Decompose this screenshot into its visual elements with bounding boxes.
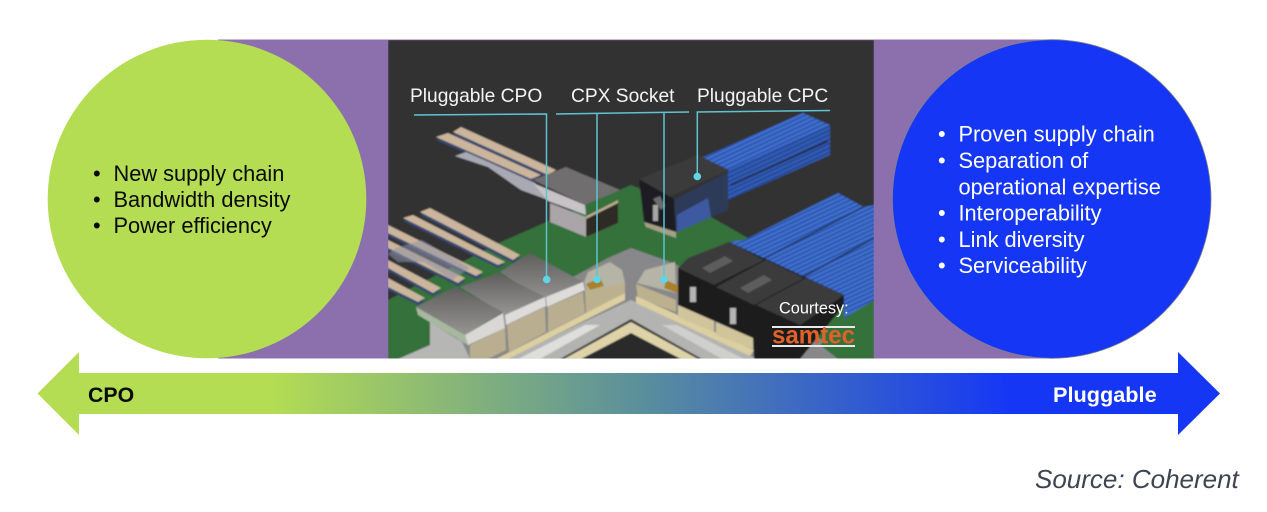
photo callout labels xyxy=(412,88,828,106)
photo callout labels: Pluggable CPO xyxy=(410,86,542,107)
leader line: Pluggable CPO xyxy=(414,114,550,283)
Pluggable attribute list xyxy=(938,122,1161,278)
upper-left module xyxy=(453,133,546,176)
Pluggable attribute list: • xyxy=(938,227,946,252)
Pluggable attribute list: Proven supply chain xyxy=(958,122,1155,146)
green CPO circle xyxy=(48,40,366,358)
Pluggable attribute list: operational expertise xyxy=(958,174,1161,199)
lower-right black connectors xyxy=(678,305,714,332)
Pluggable attribute list: • xyxy=(938,253,946,278)
upper-right blue cable xyxy=(701,113,830,200)
left ribbons xyxy=(388,211,520,305)
CPO attribute list: • xyxy=(93,213,101,238)
lower-right blue cables xyxy=(729,193,874,320)
silver frame xyxy=(458,247,838,358)
arrow label: Pluggable: Pluggable xyxy=(1053,382,1157,407)
left socket xyxy=(584,262,625,292)
CPO attribute list xyxy=(93,161,291,238)
left modules xyxy=(548,292,585,332)
CPO attribute list: • xyxy=(93,187,101,212)
Pluggable attribute list: Serviceability xyxy=(958,253,1087,278)
CPO attribute list: New supply chain xyxy=(114,161,284,186)
leader lines: CPX Socket xyxy=(556,112,689,283)
purple background band xyxy=(218,40,1053,358)
CPO attribute list: Power efficiency xyxy=(114,213,272,238)
Pluggable attribute list: • xyxy=(938,201,946,226)
blue Pluggable circle xyxy=(892,40,1211,358)
Pluggable attribute list: • xyxy=(938,122,946,146)
samtec logo: samtec xyxy=(772,322,855,350)
Pluggable attribute list: Interoperability xyxy=(958,201,1102,226)
photo callout labels: Pluggable CPC xyxy=(697,86,828,107)
CPO attribute list: Bandwidth density xyxy=(114,187,291,212)
spectrum double arrow xyxy=(38,352,1220,435)
right socket xyxy=(637,262,676,293)
upper-right connector xyxy=(674,172,728,232)
courtesy credit: Courtesy: xyxy=(779,300,849,318)
Pluggable attribute list: • xyxy=(938,148,946,173)
leader line: Pluggable CPC xyxy=(694,110,830,180)
source note: Source: Coherent xyxy=(1035,464,1241,494)
photo callout labels: CPX Socket xyxy=(571,86,675,107)
CPO attribute list: • xyxy=(93,161,101,186)
central product photo illustration xyxy=(388,40,874,359)
Pluggable attribute list: Separation of xyxy=(958,148,1089,173)
arrow label: CPO: CPO xyxy=(88,383,134,407)
Pluggable attribute list: Link diversity xyxy=(958,227,1085,252)
green PCB xyxy=(388,185,874,359)
